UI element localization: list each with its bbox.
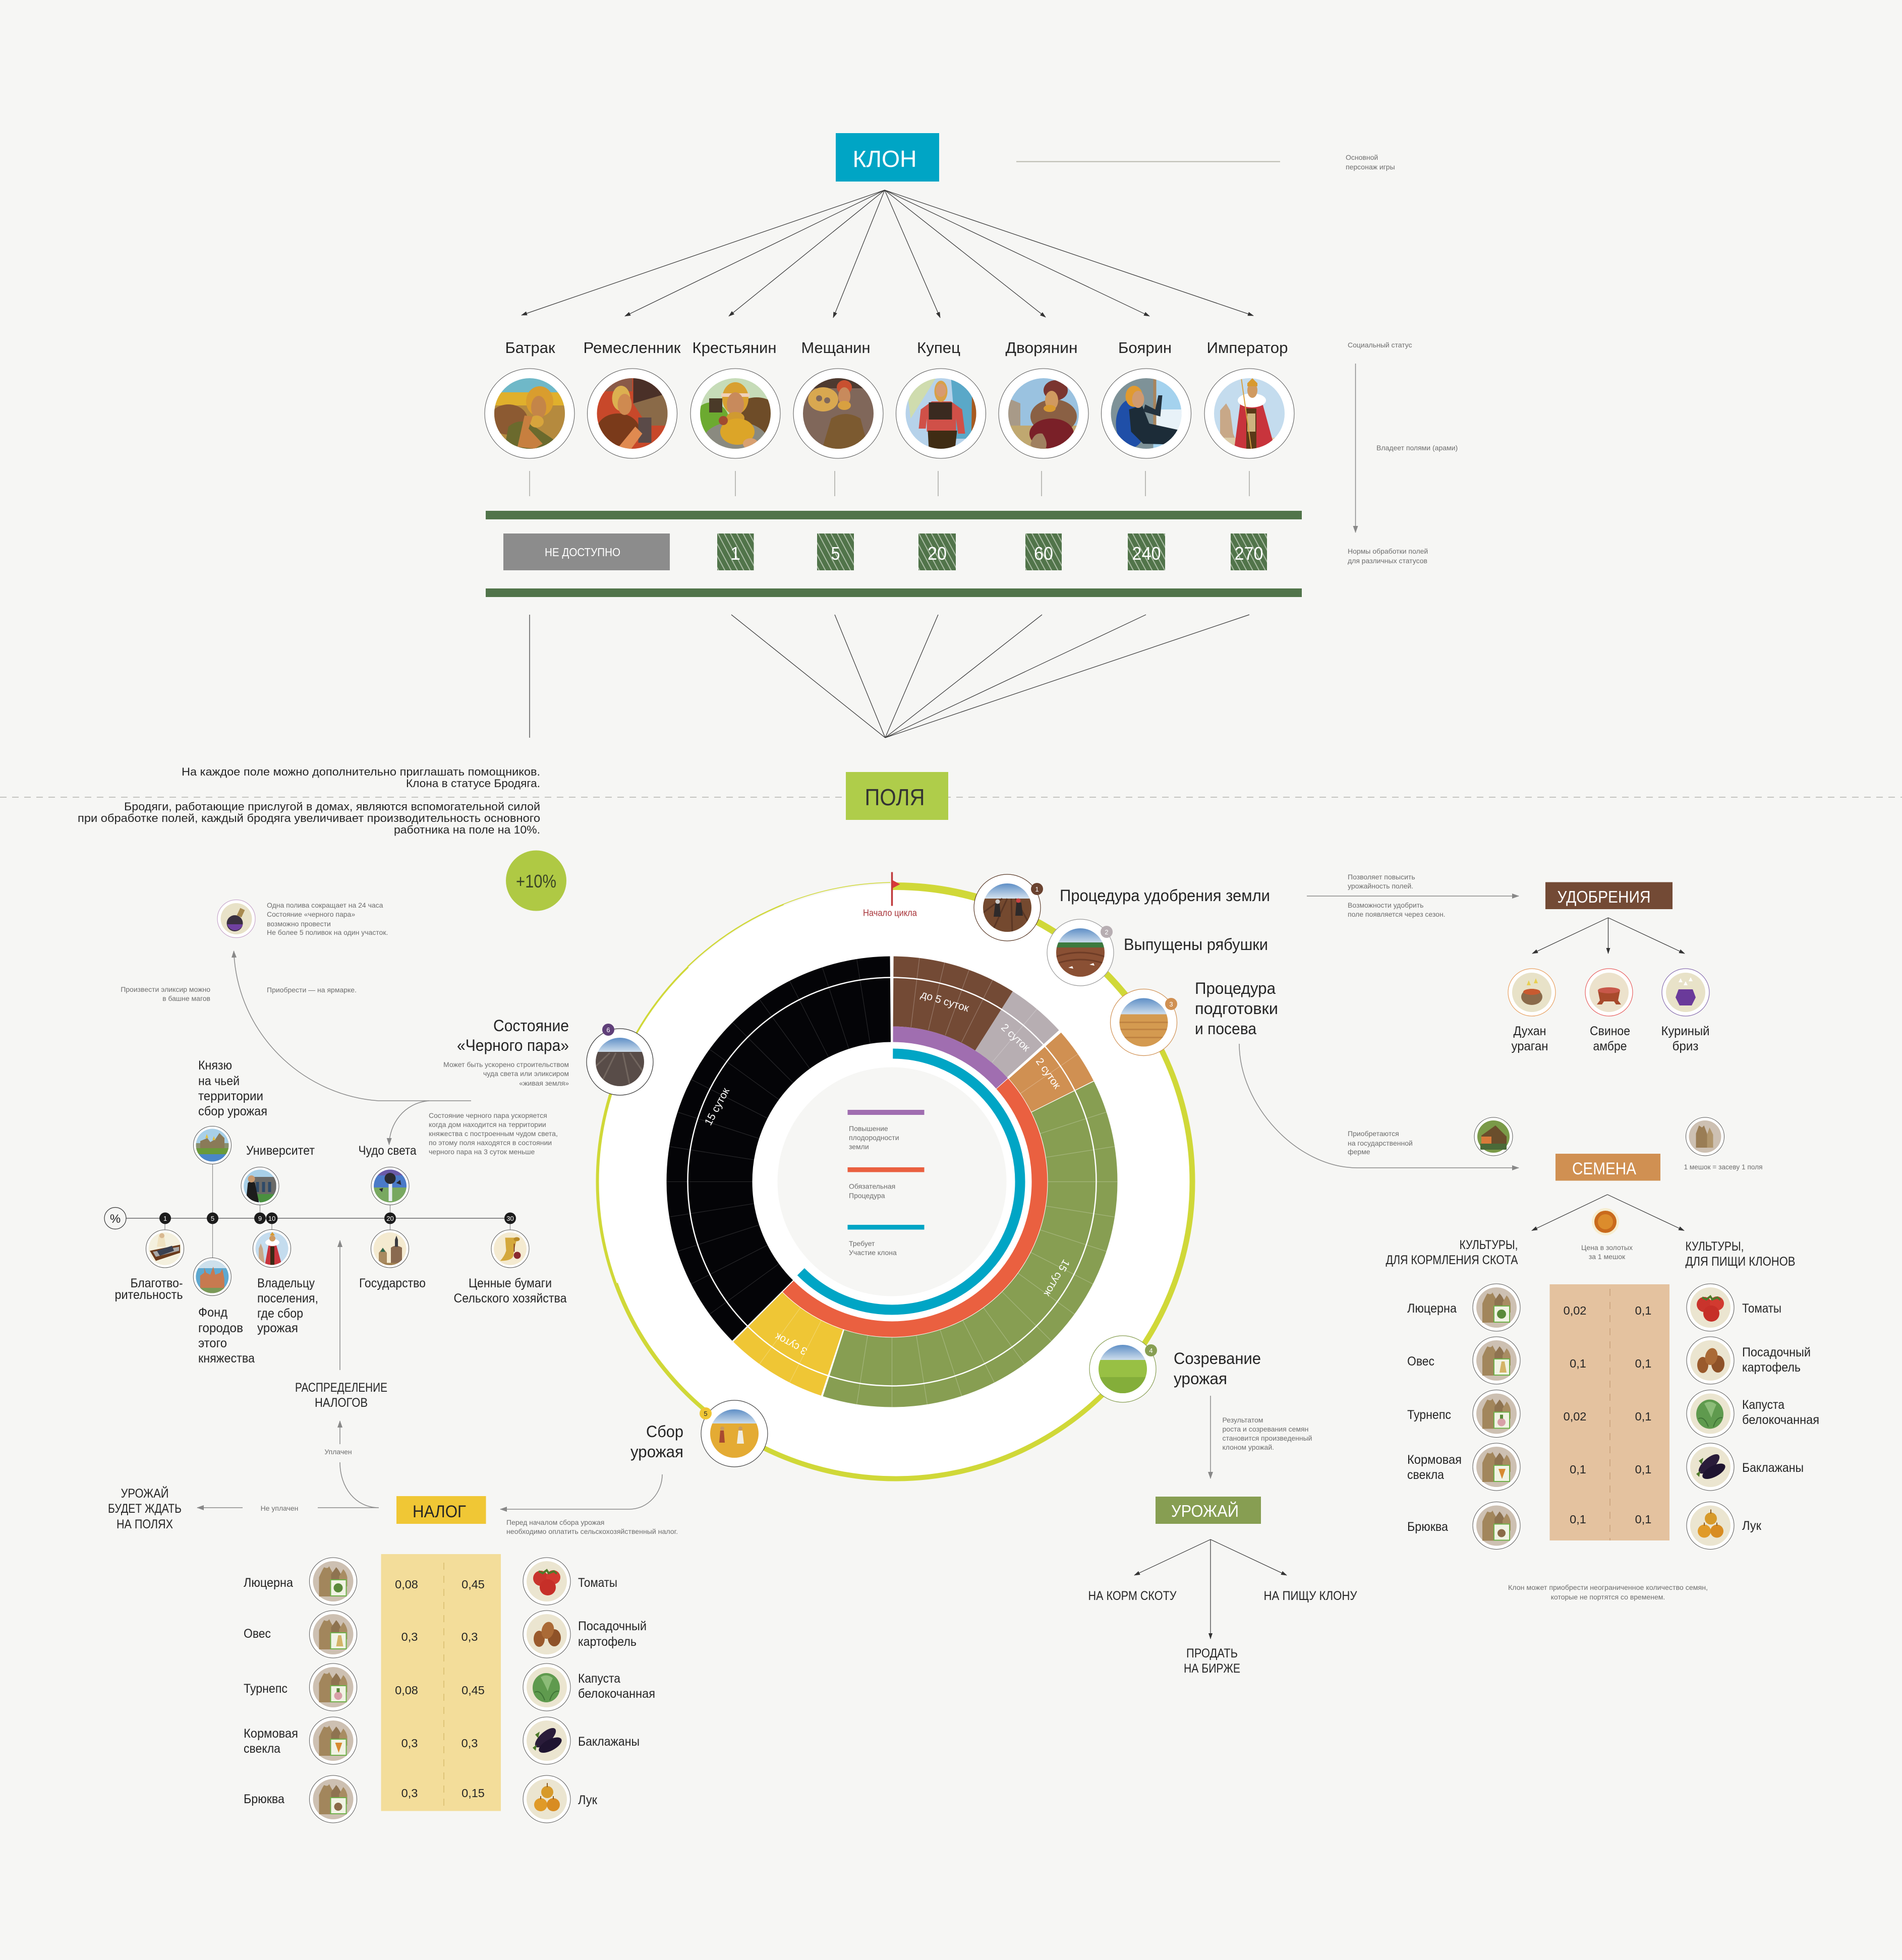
duration labels: до 5 суток [919,989,971,1015]
icon: fertilizer 3 [1662,969,1709,1016]
disc [598,884,1193,1479]
status names: Ремесленник [583,339,681,357]
heading: налог: НАЛОГ [413,1502,466,1521]
seeds: crop labels: Брюква [1407,1520,1448,1534]
table: tax: 0,3 [462,1630,478,1643]
note: unlimited seeds: Клон может приобрести неограниченное количество семян, [1508,1583,1708,1591]
side notes: status scale [1348,341,1458,565]
seed column headings: КУЛЬТУРЫ, [1460,1238,1518,1252]
text block: black fallow notes: Состояние черного пара ускоряется [429,1111,547,1119]
timeline points: 10 [268,1215,275,1222]
fertilizer labels: Свиное [1590,1024,1630,1038]
percent marker [104,1207,126,1229]
timeline points [159,1212,516,1224]
step titles: урожая [630,1443,683,1461]
flow: paid / not paid: Не уплачен [261,1504,298,1512]
note: sack equals: 1 мешок = засеву 1 поля [1684,1163,1762,1171]
tax: crop labels: Кормовая [244,1727,298,1741]
step 3 medallion: 3 [1169,1000,1173,1008]
icon: fertilizer 1 [1508,969,1555,1016]
text: tax distribution: НАЛОГОВ [315,1396,368,1410]
seeds: crop labels: Баклажаны [1742,1461,1804,1475]
status names: Батрак [505,339,555,357]
text block: helpers: работника на поле на 10%. [394,823,540,836]
table: tax [381,1554,501,1811]
portrait: крестьянин [690,369,781,464]
seeds: crop labels: Люцерна [1407,1301,1457,1316]
cycle start flag: Начало цикла [863,908,917,918]
seeds: crop labels: Посадочный [1742,1345,1811,1359]
timeline points: 1 [163,1215,167,1222]
norm values: 20 [928,543,947,564]
icon: fertilizer 2 [1585,969,1633,1016]
tax: crop labels [244,1576,655,1807]
fertilizer labels: ураган [1511,1039,1548,1053]
table: seed prices: 0,1 [1635,1357,1651,1370]
status names: Боярин [1118,339,1172,357]
step 4 medallion: 4 [1149,1347,1153,1354]
icon: city fund [193,1258,231,1296]
duration labels: 2 суток [1033,1056,1063,1091]
timeline labels: Государство [359,1276,426,1290]
timeline labels: Сельского хозяйства [454,1291,567,1305]
portrait: ремесленник [587,369,677,458]
text: tax note: необходимо оплатить сельскохозяйственный налог. [506,1527,678,1535]
timeline labels: урожая [257,1321,298,1335]
table: seed prices: 0,1 [1635,1463,1651,1476]
text block: black fallow notes: княжества с построенным чудом света, [429,1130,558,1138]
step titles: Процедура [1195,979,1276,997]
norm values: 270 [1235,543,1263,564]
status names: Крестьянин [692,339,777,357]
seeds: crop labels: Лук [1742,1519,1762,1533]
arrow: tax distribution [339,1240,340,1370]
heading: клон [836,133,939,182]
panel: field norms band [486,511,1302,597]
step 5 medallion [700,1400,768,1467]
portrait: дворянин [999,369,1088,458]
note: price: Цена в золотых [1581,1243,1633,1252]
note: farm [1348,1130,1413,1156]
text block: black fallow notes: Может быть ускорено строительством [443,1060,569,1068]
timeline labels: Благотво- [130,1276,183,1290]
text: tax note: Перед началом сбора урожая [506,1518,604,1526]
side notes: status scale: для различных статусов [1348,557,1427,565]
table: tax: 0,15 [462,1787,485,1800]
timeline labels: на чьей [198,1074,240,1088]
icon: farm [1474,1117,1513,1156]
segments [701,991,1082,1373]
arrows: harvest uses [1134,1539,1287,1639]
timeline labels: княжества [198,1351,255,1365]
text block: black fallow notes: «живая земля» [519,1079,569,1087]
text block: black fallow notes: черного пара на 3 суток меньше [429,1148,535,1156]
tax: crop labels: Баклажаны [578,1735,640,1749]
timeline labels: сбор урожая [198,1104,267,1118]
timeline labels [115,1058,567,1365]
note: price: за 1 мешок [1589,1253,1626,1261]
step 3 medallion [1111,989,1177,1056]
timeline points: 5 [211,1215,214,1222]
fertilizer labels [1511,1024,1710,1053]
tax: crop labels: картофель [578,1635,637,1649]
timeline labels: Князю [198,1058,232,1073]
legend: centre: Участие клона [849,1249,897,1257]
step titles [457,886,1278,1461]
text block: helpers: Клона в статусе Бродяга. [406,777,540,790]
note: main character: персонаж игры [1346,163,1395,171]
legend: centre: Требует [849,1239,875,1248]
legend: centre: Повышение [849,1124,888,1133]
side notes: status scale: Владеет полями (арами) [1376,444,1458,452]
tax: crop labels: Турнепс [244,1682,287,1696]
arrows: clone to statuses [522,190,1253,318]
tax: crop labels: белокочанная [578,1687,655,1701]
seeds: crop labels: Кормовая [1407,1453,1462,1467]
step 1 medallion: 1 [1035,885,1039,893]
heading: поля: ПОЛЯ [864,784,925,810]
seed column headings: ДЛЯ КОРМЛЕНИЯ СКОТА [1386,1253,1518,1267]
tax: crop labels: Овес [244,1627,271,1641]
table: tax: 0,3 [401,1737,418,1750]
note: main character [1016,153,1395,171]
note: farm: на государственной [1348,1139,1413,1147]
text: tax note [506,1518,678,1535]
text: harvest waits: УРОЖАЙ [121,1486,168,1501]
step titles: Процедура удобрения земли [1060,886,1270,905]
timeline labels: рительность [115,1288,183,1302]
harvest use labels: НА ПИЩУ КЛОНУ [1264,1589,1357,1603]
tax: crop labels: Томаты [578,1576,617,1590]
portrait: боярин [1102,369,1191,458]
step 2 medallion: 2 [1105,928,1109,936]
step titles: и посева [1195,1020,1256,1038]
timeline labels: этого [198,1336,227,1350]
tax: crop labels: свекла [244,1742,280,1756]
table: tax: 0,3 [401,1787,418,1800]
arrow and note: ripening: клоном урожай. [1223,1443,1274,1451]
timeline points: 9 [258,1215,262,1222]
text block: elixir notes: Одна полива сокращает на 24 часа [267,901,383,909]
text block: elixir notes: возможно провести [267,920,331,928]
step 2 medallion [1047,919,1114,986]
text block: elixir notes: в башне магов [162,994,210,1002]
norm values: 60 [1034,543,1053,564]
legend: centre: Процедура [849,1192,885,1200]
norm values: 240 [1132,543,1161,564]
arrow and note: ripening: Результатом [1223,1416,1263,1424]
portrait: купец [896,369,986,458]
text block: black fallow notes: чуда света или эликсиром [483,1070,569,1078]
seeds: crop labels [1407,1301,1819,1534]
arrows: seed types [1532,1195,1684,1230]
icon: elixir [217,900,255,938]
harvest use labels [1088,1589,1357,1676]
norm values: 1 [730,543,740,564]
duration labels: 3 суток [773,1330,809,1357]
note: price [1581,1243,1633,1261]
tax: crop labels: Капуста [578,1672,620,1686]
harvest use labels: НА БИРЖЕ [1184,1661,1240,1676]
note: unlimited seeds: которые не портятся со временем. [1551,1593,1665,1601]
table: tax: 0,08 [395,1684,418,1697]
legend: centre: земли [849,1143,869,1151]
seeds: crop labels: Капуста [1742,1398,1784,1412]
seeds: food crop icons [1687,1284,1734,1549]
text block: helpers [78,765,540,836]
arrow and note: ripening [1211,1396,1312,1478]
tax: crop labels: Брюква [244,1792,284,1806]
table: seed prices: 0,02 [1564,1410,1586,1423]
arrow and note: fertilizer: урожайность полей. [1348,882,1413,890]
seeds: fodder crop icons [1473,1284,1520,1549]
text block: black fallow notes [429,1060,569,1156]
seeds: crop labels: свекла [1407,1468,1444,1482]
heading: клон: КЛОН [852,146,917,172]
step 6 medallion [585,1024,653,1095]
text block: helpers: Бродяги, работающие прислугой в домах, являются вспомогательной силой [124,800,540,813]
table: seed prices: 0,1 [1570,1513,1586,1526]
tax: food crop icons [523,1558,570,1823]
seed column headings [1386,1238,1796,1269]
portrait: батрак [485,369,574,458]
note: unlimited seeds [1508,1583,1708,1601]
heading: поля [846,772,948,820]
step titles: «Черного пара» [457,1036,569,1054]
duration labels [703,989,1072,1357]
table: tax: 0,45 [462,1578,485,1591]
icon: wonder [371,1167,409,1205]
connector lines under portraits [530,471,1249,496]
icon: settlement owner [253,1229,291,1268]
timeline labels: Университет [246,1144,315,1158]
text block: elixir notes: Не более 5 поливок на один участок. [267,928,388,936]
step 1 medallion [974,874,1043,941]
fertilizer labels: бриз [1673,1039,1699,1053]
arrow and note: fertilizer: поле появляется через сезон. [1348,910,1446,918]
timeline labels: поселения, [257,1291,318,1305]
legend: centre [847,1110,924,1257]
status names: Дворянин [1006,339,1077,357]
tax: crop labels: Люцерна [244,1576,293,1590]
icon: seed sacks [1686,1117,1724,1156]
timeline labels: Фонд [198,1305,227,1320]
portrait: император [1204,369,1294,458]
arrow and note: fertilizer: Позволяет повысить [1348,873,1415,881]
table: seed prices: 0,1 [1570,1463,1586,1476]
arrow and note: ripening: роста и созревания семян [1223,1425,1308,1433]
icon: university [241,1167,279,1205]
fan lines to fields [530,615,1249,738]
step titles: Состояние [493,1017,569,1035]
status names [505,339,1288,357]
table: seed prices: 0,1 [1635,1513,1651,1526]
side notes: status scale: Социальный статус [1348,341,1412,349]
cycle start flag [863,872,917,918]
note: farm: ферме [1348,1148,1370,1156]
icon: charity [146,1230,184,1268]
chart: cycle donut [591,872,1200,1486]
text: tax distribution: РАСПРЕДЕЛЕНИЕ [295,1381,387,1395]
table: tax: 0,3 [401,1630,418,1643]
seed column headings: ДЛЯ ПИЩИ КЛОНОВ [1686,1255,1796,1269]
centre disc [778,1067,1007,1296]
duration labels: 15 суток [703,1086,732,1127]
seeds: crop labels: белокочанная [1742,1413,1819,1427]
not available box: НЕ ДОСТУПНО [545,546,620,559]
step titles: Выпущены рябушки [1124,935,1268,954]
icon: state [371,1230,409,1268]
table: seed prices [1549,1284,1669,1540]
arrows: fertilizer types [1532,918,1685,954]
table: seed prices: 0,1 [1570,1357,1586,1370]
icon: securities [491,1230,529,1268]
text block: elixir notes: Приобрести — на ярмарке. [267,986,357,994]
table: seed prices: 0,1 [1635,1304,1651,1317]
fertilizer labels: амбре [1593,1039,1627,1053]
tax: crop labels: Посадочный [578,1619,647,1633]
chart: tax timeline [104,1164,516,1258]
timeline labels: городов [198,1321,243,1335]
arrow and note: fertilizer: Возможности удобрить [1348,901,1423,909]
heading: урожай: УРОЖАЙ [1171,1502,1239,1520]
text: harvest waits: НА ПОЛЯХ [117,1517,173,1531]
tax: fodder crop icons [310,1558,357,1823]
step 5 medallion: 5 [704,1410,708,1417]
text block: black fallow notes: когда дом находится на территории [429,1120,546,1129]
table: tax: 0,08 [395,1578,418,1591]
note: main character: Основной [1346,153,1378,161]
percent marker: % [110,1212,121,1226]
status names: Купец [917,339,960,357]
curved arrows: black fallow [234,951,471,1145]
flow: paid / not paid [197,1421,379,1512]
side notes: status scale: Нормы обработки полей [1348,547,1428,555]
table: tax: 0,45 [462,1684,485,1697]
icon: prince [194,1126,231,1164]
norm values: 5 [831,543,840,564]
table: seed prices: 0,02 [1564,1304,1586,1317]
seeds: crop labels: Томаты [1742,1301,1781,1316]
badge: +10% [506,850,566,911]
step titles: урожая [1174,1370,1227,1388]
heading: удобрения [1545,882,1673,909]
tax: crop labels: Лук [578,1793,598,1807]
text block: elixir notes: Состояние «черного пара» [267,910,355,918]
curved arrow: to seeds [1239,1044,1519,1168]
text: harvest waits: БУДЕТ ЖДАТЬ [108,1502,182,1516]
fertilizer labels: Духан [1513,1024,1546,1038]
icon: coin [1592,1208,1619,1235]
text block: helpers: при обработке полей, каждый бродяга увеличивает производительность основного [78,812,540,824]
arrow: harvest to tax [500,1474,662,1509]
heading: урожай [1156,1497,1261,1524]
step 6 medallion: 6 [606,1026,610,1034]
timeline labels: где сбор [257,1306,303,1321]
text block: helpers: На каждое поле можно дополнительно приглашать помощников. [182,765,540,778]
flow: paid / not paid: Уплачен [324,1448,352,1456]
heading: удобрения: УДОБРЕНИЯ [1558,887,1650,906]
text block: elixir notes [121,901,388,1002]
harvest use labels: ПРОДАТЬ [1186,1646,1238,1660]
timeline labels: Ценные бумаги [469,1276,552,1290]
status names: Мещанин [801,339,871,357]
fertilizer labels: Куриный [1661,1024,1710,1038]
legend: centre: плодородности [849,1134,899,1142]
heading: налог [396,1496,486,1524]
timeline labels: территории [198,1089,263,1103]
text block: black fallow notes: по этому поля находятся в состоянии [429,1139,552,1147]
portrait: мещанин [793,369,883,458]
text block: elixir notes: Произвести эликсир можно [121,985,210,993]
heading: семена: СЕМЕНА [1572,1159,1636,1178]
seeds: crop labels: Турнепс [1407,1408,1451,1422]
day divisions [760,958,1118,1407]
timeline labels: Чудо света [358,1144,417,1158]
arrow and note: fertilizer [1307,873,1519,918]
timeline points: 30 [506,1215,514,1222]
table: tax: 0,3 [462,1737,478,1750]
table: seed prices: 0,1 [1635,1410,1651,1423]
step titles: подготовки [1195,999,1278,1018]
text: harvest waits [108,1486,182,1531]
harvest use labels: НА КОРМ СКОТУ [1088,1589,1177,1603]
seeds: crop labels: Овес [1407,1354,1434,1369]
seed column headings: КУЛЬТУРЫ, [1686,1239,1744,1254]
duration labels: 2 суток [999,1022,1032,1054]
status names: Император [1206,339,1288,357]
legend: centre: Обязательная [849,1182,895,1190]
norm values [717,533,1267,570]
duration labels: 15 суток [1042,1258,1072,1299]
badge: +10%: +10% [516,871,556,892]
note: farm: Приобретаются [1348,1130,1399,1138]
seeds: crop labels: картофель [1742,1360,1801,1375]
heading: семена [1555,1154,1660,1181]
timeline points: 20 [386,1215,394,1222]
not available box [503,533,670,570]
cycle ring [591,877,1200,1486]
step titles: Созревание [1174,1349,1261,1368]
timeline labels: Владельцу [257,1276,315,1290]
step titles: Сбор [646,1422,683,1441]
arrow and note: ripening: становится произведенный [1223,1434,1312,1442]
step 4 medallion [1089,1336,1157,1402]
text: tax distribution [295,1381,387,1410]
